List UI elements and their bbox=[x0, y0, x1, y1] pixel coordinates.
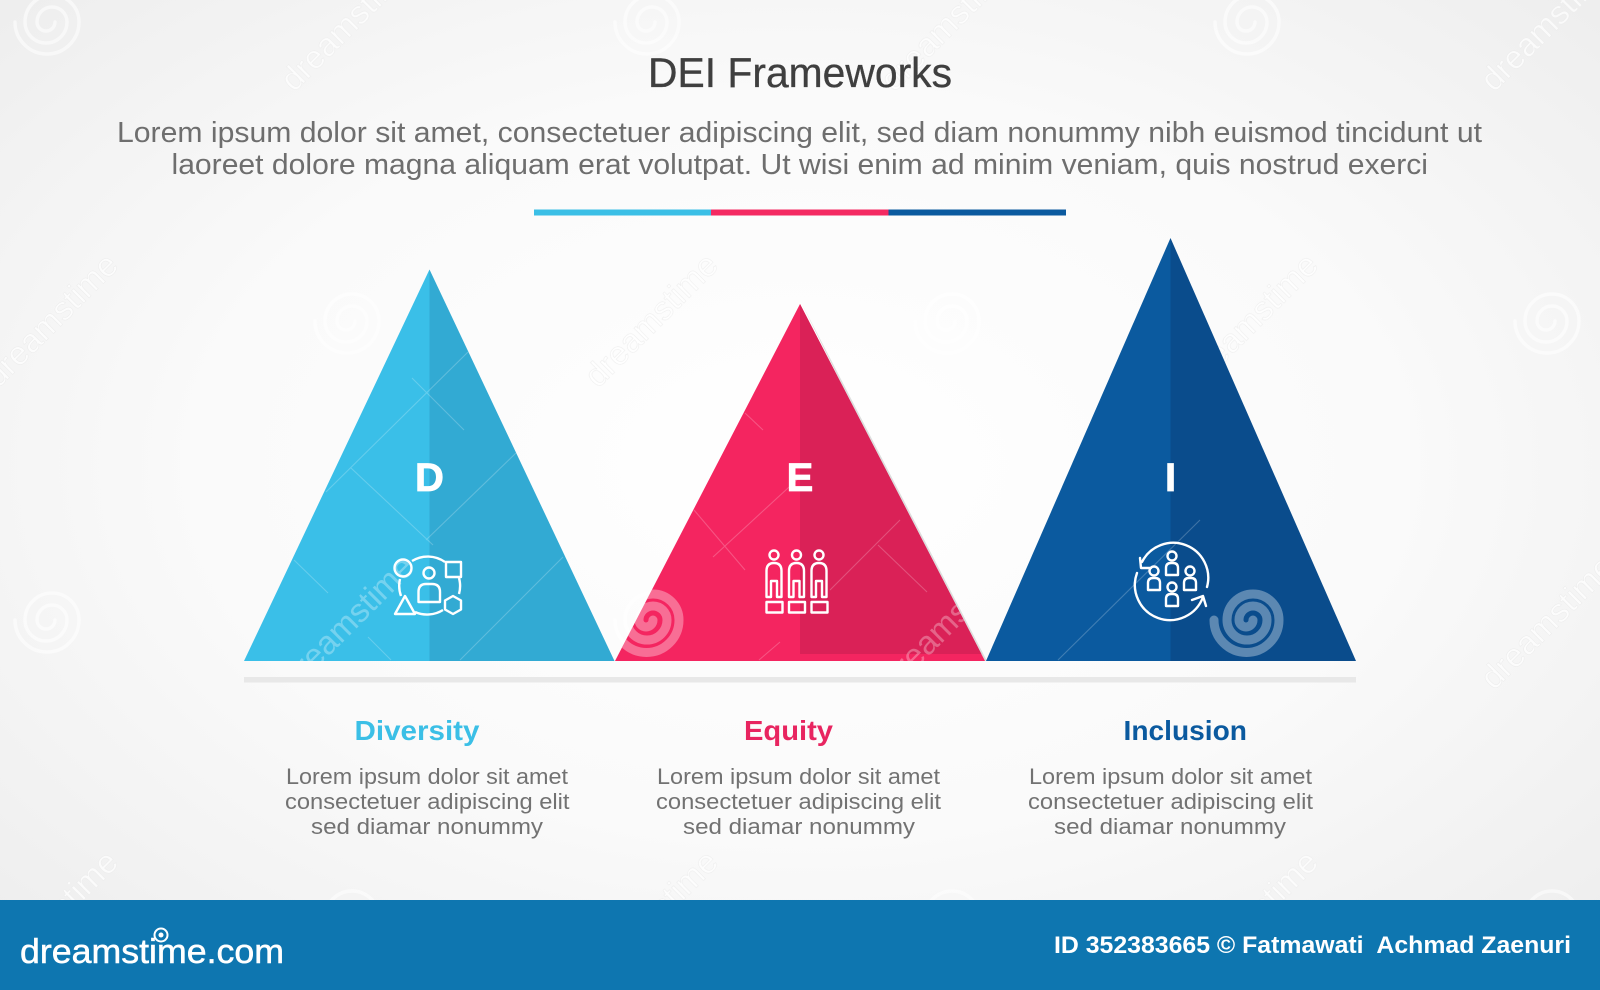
icon: equity three people on pedestals bbox=[766, 550, 828, 612]
body text: Inclusion: Lorem ipsum dolor sit amet bbox=[1029, 764, 1312, 789]
watermark text on background: dreamstime bbox=[577, 246, 725, 394]
label: Equity: Equity bbox=[744, 715, 833, 746]
body text: Inclusion: sed diamar nonummy bbox=[1054, 814, 1286, 839]
watermark text over triangles: dreamstime bbox=[873, 548, 1021, 696]
watermark spirals over triangles bbox=[614, 594, 1279, 652]
subtitle text: laoreet dolore magna aliquam erat volutpat. Ut wisi enim ad minim veniam, quis nostrud exerci bbox=[172, 149, 1428, 181]
icon: inclusion people with cycle arrows bbox=[1135, 543, 1208, 620]
triangle: I inclusion bbox=[986, 238, 1356, 661]
body text: Equity: Lorem ipsum dolor sit amet bbox=[657, 764, 940, 789]
body text: Equity: consectetuer adipiscing elit bbox=[656, 789, 941, 814]
watermark lines across triangles bbox=[294, 352, 1200, 660]
body text: Equity: sed diamar nonummy bbox=[683, 814, 915, 839]
title: DEI Frameworks bbox=[648, 49, 952, 96]
body text: Inclusion: consectetuer adipiscing elit bbox=[1028, 789, 1313, 814]
body text: Diversity bbox=[285, 764, 570, 839]
body text: Diversity: consectetuer adipiscing elit bbox=[285, 789, 570, 814]
watermark text on background: dreamstime bbox=[1177, 246, 1325, 394]
body text: Diversity: sed diamar nonummy bbox=[311, 814, 543, 839]
watermark text over triangles bbox=[300, 560, 964, 661]
letter I: I bbox=[1165, 456, 1176, 500]
subtitle text: Lorem ipsum dolor sit amet, consectetuer adipiscing elit, sed diam nonummy nibh euismod tincidunt ut bbox=[117, 117, 1482, 149]
icon: diversity people and shapes bbox=[394, 557, 461, 615]
body text: Inclusion bbox=[1028, 764, 1313, 839]
watermark text over triangles: dreamstime bbox=[273, 548, 421, 696]
label: Inclusion: Inclusion bbox=[1124, 715, 1247, 746]
baseline shelf bbox=[244, 677, 1356, 682]
letter D: D bbox=[415, 456, 444, 500]
tricolor divider bar bbox=[534, 210, 1066, 216]
triangle: E equity bbox=[615, 304, 987, 661]
letter E: E bbox=[787, 456, 813, 500]
subtitle text bbox=[117, 117, 1482, 181]
footer band bbox=[0, 900, 1600, 990]
watermark text on background: dreamstime bbox=[1177, 843, 1325, 990]
label: Diversity: Diversity bbox=[354, 715, 480, 746]
body text: Diversity: Lorem ipsum dolor sit amet bbox=[286, 764, 568, 789]
footer credit: ID 352383665 © Fatmawati Achmad Zaenuri bbox=[1054, 932, 1571, 959]
triangle: D diversity bbox=[244, 270, 614, 661]
watermark text on background: dreamstime bbox=[577, 843, 725, 990]
body text: Equity bbox=[656, 764, 941, 839]
footer logo: dreamstime.com bbox=[20, 933, 284, 971]
